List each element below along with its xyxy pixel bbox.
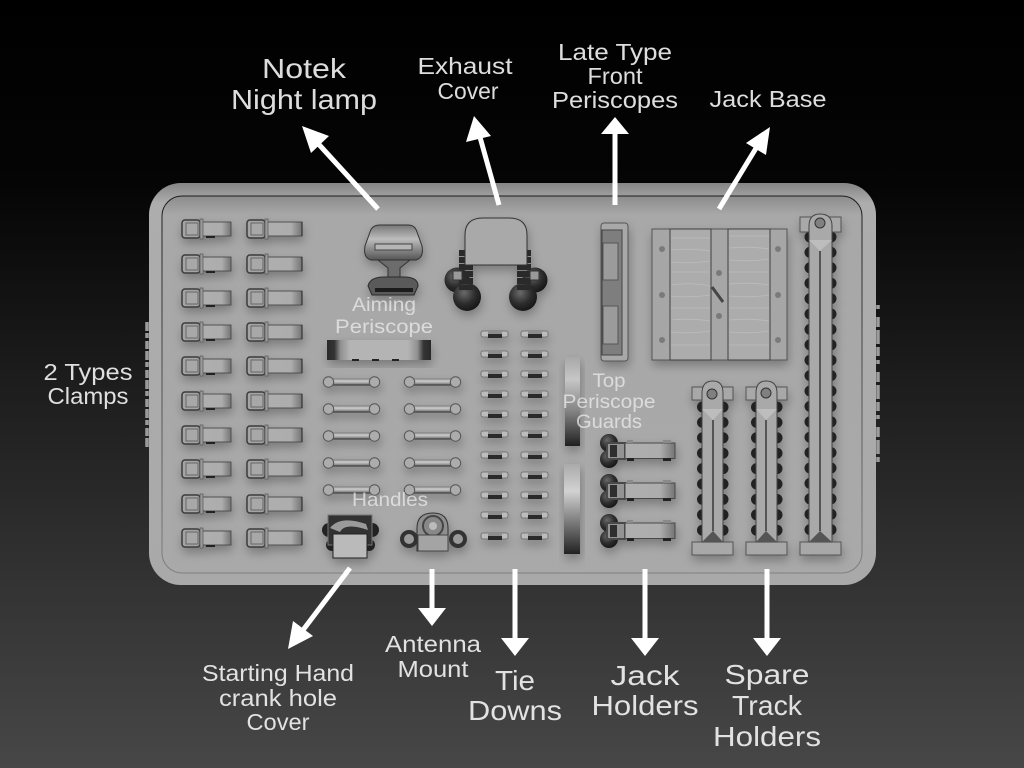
arrow: late type front periscopes xyxy=(601,117,629,205)
label: Aiming Periscope: Aiming xyxy=(352,295,416,316)
label: Spare Track Holders: Spare xyxy=(724,659,810,690)
label: Late Type Front Periscopes: Front xyxy=(588,63,643,89)
label: Top Periscope Guards: Periscope xyxy=(562,392,656,413)
label: Jack Holders: Holders xyxy=(592,690,698,721)
label: Tie Downs xyxy=(468,665,562,726)
jack holders xyxy=(600,434,675,548)
tray recess xyxy=(162,196,862,573)
label: Jack Base: Jack Base xyxy=(710,86,826,112)
panel: tray xyxy=(149,183,876,585)
label: Starting Hand crank hole Cover xyxy=(202,660,354,735)
label: Late Type Front Periscopes: Periscopes xyxy=(552,87,678,113)
label: Starting Hand crank hole Cover: Starting Hand xyxy=(202,660,354,686)
arrow: notek night lamp xyxy=(302,126,378,209)
spare track holder, short right xyxy=(746,381,787,555)
handles xyxy=(323,377,461,495)
tie downs xyxy=(481,330,548,540)
label: Starting Hand crank hole Cover: crank hole xyxy=(219,685,337,711)
arrow: jack holders xyxy=(631,569,659,656)
label: Antenna Mount xyxy=(385,631,481,682)
clamps, column 2 xyxy=(247,219,302,548)
label: Top Periscope Guards xyxy=(562,371,656,433)
label: 2 Types Clamps: 2 Types xyxy=(44,359,132,385)
clamps, column 1 xyxy=(182,219,231,548)
label: Top Periscope Guards: Top xyxy=(592,371,626,392)
label: Spare Track Holders: Holders xyxy=(713,721,821,752)
label: 2 Types Clamps: Clamps xyxy=(48,383,128,409)
arrow: starting hand crank hole cover xyxy=(288,568,350,649)
arrow: jack base xyxy=(719,127,770,209)
label: Aiming Periscope xyxy=(335,295,433,338)
label: Jack Holders: Jack xyxy=(610,660,681,691)
label: Jack Holders xyxy=(592,660,698,721)
label: Late Type Front Periscopes: Late Type xyxy=(558,39,672,65)
arrow: spare track holders xyxy=(753,569,781,656)
label: Notek Night lamp xyxy=(231,53,377,115)
spare track holder, short left xyxy=(692,381,733,555)
label: Notek Night lamp: Night lamp xyxy=(231,84,377,115)
exhaust cover xyxy=(444,218,548,311)
label: 2 Types Clamps xyxy=(44,359,132,409)
label: Spare Track Holders xyxy=(713,659,821,752)
periscope guards xyxy=(564,357,580,554)
arrow: tie downs xyxy=(501,569,529,656)
label: Spare Track Holders: Track xyxy=(732,690,803,721)
starting hand crank hole cover xyxy=(322,515,379,558)
label: Late Type Front Periscopes xyxy=(552,39,678,113)
label: Exhaust Cover xyxy=(418,53,513,104)
label: Top Periscope Guards: Guards xyxy=(576,412,642,433)
label: Notek Night lamp: Notek xyxy=(262,53,347,84)
label: Antenna Mount: Mount xyxy=(398,656,469,682)
antenna mount xyxy=(400,513,467,551)
front periscopes xyxy=(601,223,628,361)
spare track holder, long xyxy=(800,214,841,555)
edge ticks left xyxy=(145,322,149,447)
arrow: exhaust cover xyxy=(466,116,499,205)
jack base xyxy=(652,229,787,360)
label: Antenna Mount: Antenna xyxy=(385,631,481,657)
arrow: antenna mount xyxy=(418,569,446,626)
label: Tie Downs: Downs xyxy=(468,695,562,726)
label: Starting Hand crank hole Cover: Cover xyxy=(246,709,310,735)
label: Handles: Handles xyxy=(352,490,428,511)
edge ticks right xyxy=(876,305,880,462)
aiming periscope xyxy=(327,340,431,360)
notek night lamp xyxy=(365,225,422,295)
label: Aiming Periscope: Periscope xyxy=(335,317,433,338)
label: Exhaust Cover: Cover xyxy=(438,78,499,104)
label: Exhaust Cover: Exhaust xyxy=(418,53,513,79)
label: Tie Downs: Tie xyxy=(495,665,535,696)
